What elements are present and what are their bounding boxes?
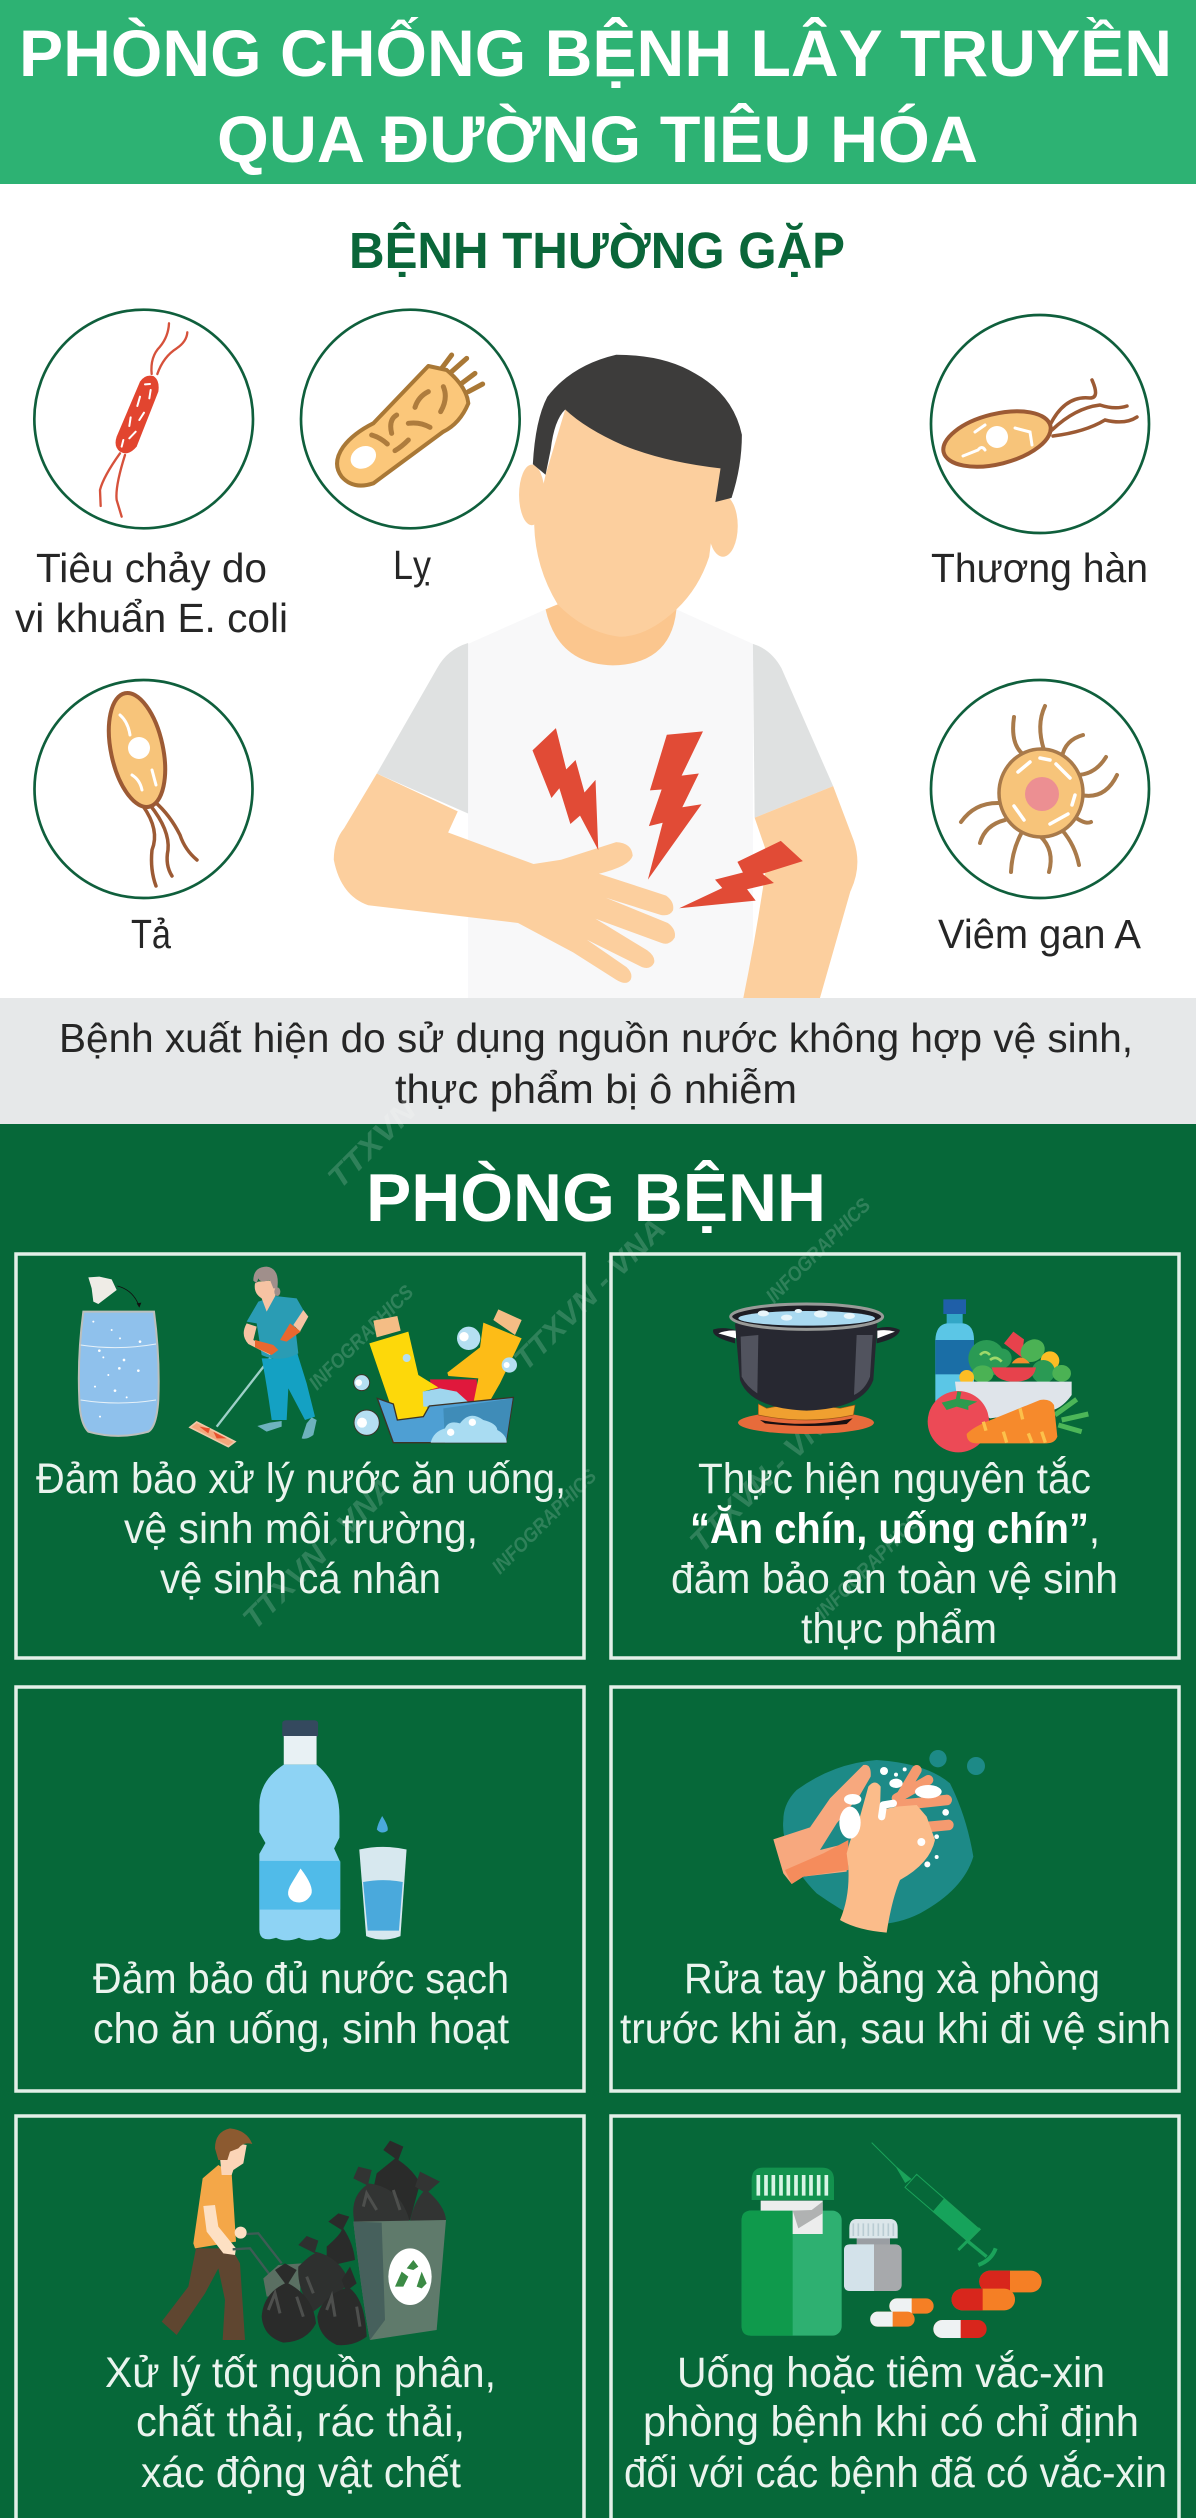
watermarks: TTXVN - VNA xyxy=(684,1394,848,1559)
icon: cleaner with mop xyxy=(190,1267,317,1447)
text block: vệ sinh cá nhân xyxy=(160,1555,441,1603)
watermarks: TTXVN - VNA xyxy=(237,1471,401,1636)
icon: recycling bin and bags xyxy=(262,2141,446,2345)
icon: washing hands with soap xyxy=(773,1750,985,1933)
panel: clean water xyxy=(16,1687,584,2091)
watermarks xyxy=(237,1093,926,1636)
text block: Thực hiện nguyên tắc xyxy=(698,1455,1091,1503)
icon: rubber gloves and wash basin xyxy=(354,1309,522,1443)
text block: trước khi ăn, sau khi đi vệ sinh xyxy=(620,2005,1171,2053)
text block: chất thải, rác thải, xyxy=(136,2398,465,2446)
text block: Xử lý tốt nguồn phân, xyxy=(105,2349,496,2397)
title banner: PHÒNG CHỐNG BỆNH LÂY TRUYỀN xyxy=(19,16,1172,90)
icon: capsules xyxy=(870,2271,1042,2338)
text block: đảm bảo an toàn vệ sinh xyxy=(671,1555,1118,1603)
icon: water barrel, cleaner and gloves xyxy=(79,1267,522,1447)
text block: Đảm bảo đủ nước sạch xyxy=(93,1955,509,2003)
icon: typhoid bacterium circle xyxy=(931,315,1149,533)
icon: salad bowl with tomato and carrot xyxy=(928,1332,1088,1452)
label: dysentery: Lỵ xyxy=(393,542,431,588)
text block: “Ăn chín, uống chín”, xyxy=(690,1505,1100,1553)
watermarks: INFOGRAPHICS xyxy=(305,1281,419,1395)
text block: Đảm bảo xử lý nước ăn uống, xyxy=(36,1455,566,1503)
icon: green medicine bottle xyxy=(742,2168,842,2336)
text block xyxy=(36,1455,566,1603)
prevention panel background xyxy=(0,1124,1196,2518)
icon: pain bolt right xyxy=(679,841,803,908)
icon: man with trash bags xyxy=(162,2128,446,2345)
label: typhoid: Thương hàn xyxy=(931,545,1148,591)
cause band: Bệnh xuất hiện do sử dụng nguồn nước không hợp vệ sinh, xyxy=(59,1015,1133,1061)
text block xyxy=(93,1955,509,2053)
title banner: QUA ĐƯỜNG TIÊU HÓA xyxy=(217,102,978,176)
heading: prevention: PHÒNG BỆNH xyxy=(366,1159,826,1236)
panel: vaccination xyxy=(611,2116,1179,2518)
text block: phòng bệnh khi có chỉ định xyxy=(643,2398,1139,2446)
icon: water treatment barrel xyxy=(79,1277,159,1436)
icon: small white bottle xyxy=(844,2219,902,2291)
illustration: man with stomach ache xyxy=(334,355,857,1000)
icon: pain bolt left xyxy=(532,728,598,850)
panel: hand washing xyxy=(611,1687,1179,2091)
icon: boiling pot on burner xyxy=(713,1304,900,1434)
text block: cho ăn uống, sinh hoạt xyxy=(93,2005,509,2053)
panel: cooked food and boiled water xyxy=(611,1254,1179,1658)
text block: Rửa tay bằng xà phòng xyxy=(684,1955,1100,2003)
watermarks: INFOGRAPHICS xyxy=(488,1465,602,1579)
text block: Uống hoặc tiêm vắc-xin xyxy=(677,2349,1105,2397)
label: hepatitis A: Viêm gan A xyxy=(938,911,1142,957)
icon: hepatitis A virus circle xyxy=(931,680,1149,898)
panel: water, environment and personal hygiene xyxy=(16,1254,584,1658)
title banner xyxy=(0,0,1196,184)
watermarks: TTXVN xyxy=(322,1093,424,1195)
heading: common diseases: BỆNH THƯỜNG GẶP xyxy=(349,221,845,279)
icon: E. coli bacterium circle xyxy=(34,310,253,528)
text block: xác động vật chết xyxy=(141,2449,461,2497)
text block: vệ sinh môi trường, xyxy=(124,1505,478,1553)
icon: cholera bacterium circle xyxy=(34,680,252,898)
text block xyxy=(105,2349,496,2497)
icon: water bottle xyxy=(935,1299,974,1403)
label: E. coli diarrhea: vi khuẩn E. coli xyxy=(15,595,288,641)
icon: water bottle and glass xyxy=(259,1720,407,1940)
label: E. coli diarrhea: Tiêu chảy do xyxy=(36,545,267,591)
text block xyxy=(671,1455,1118,1653)
icon: dysentery bacterium circle xyxy=(301,310,520,528)
icon: medicine bottles, syringe and pills xyxy=(742,2143,1042,2338)
icon: boiling pot, bottle and salad xyxy=(713,1299,1088,1452)
watermarks: INFOGRAPHICS xyxy=(812,1510,926,1624)
panel: waste treatment xyxy=(16,2116,584,2518)
text block xyxy=(620,1955,1171,2053)
cause band: thực phẩm bị ô nhiễm xyxy=(395,1066,797,1112)
watermarks: TTXVN - VNA xyxy=(508,1212,672,1377)
cause band xyxy=(0,998,1196,1124)
label: E. coli diarrhea xyxy=(15,545,288,641)
watermarks: INFOGRAPHICS xyxy=(762,1194,876,1308)
text block: thực phẩm xyxy=(801,1605,997,1653)
text block: đối với các bệnh đã có vắc-xin xyxy=(624,2449,1167,2497)
label: cholera: Tả xyxy=(131,911,171,957)
icon: syringe xyxy=(872,2143,996,2265)
icon: pain bolt middle xyxy=(648,731,703,880)
icon: man pulling cart xyxy=(162,2128,282,2340)
text block xyxy=(624,2349,1167,2497)
